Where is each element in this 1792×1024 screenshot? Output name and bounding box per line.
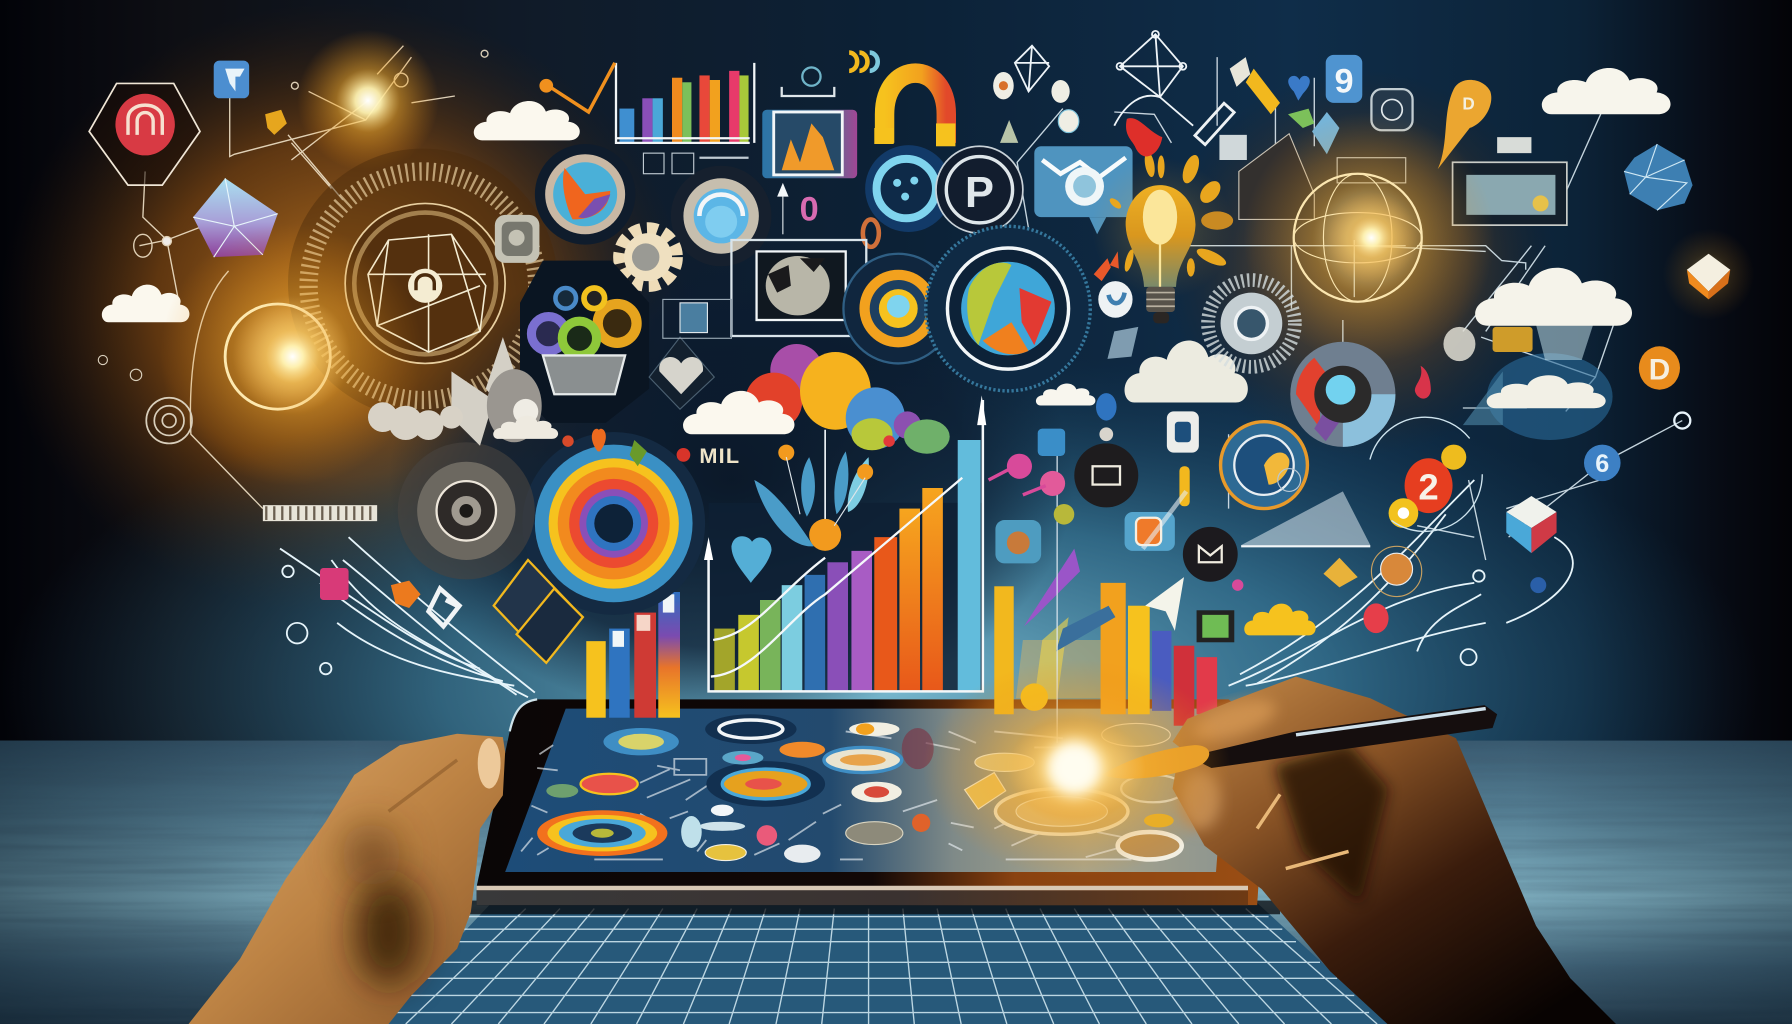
icon: orange D badge: D [1649,353,1670,386]
cloud: inside dome [1487,375,1606,408]
cutting mat grid [363,901,1389,1024]
icon: app squares and dots [1038,393,1301,506]
dashboard rainbow target [537,810,667,856]
icon: number 2 badge group: 2 [1418,466,1439,507]
tablet body [477,699,1269,905]
cloud: soft cluster [368,402,463,440]
balloons cluster [745,344,950,526]
icon: house and dashboard silhouette [1239,134,1567,225]
icon: orange cube [1663,229,1754,320]
icon: cyan face badge [865,145,952,232]
bar chart: centre [704,395,986,691]
cloud: large right [1475,268,1632,326]
icon: heart frame [649,337,714,409]
trend line [711,478,962,677]
label: MIL: MIL [699,443,740,468]
icon: framed area chart [762,110,857,178]
icon: P circle badge: P [965,169,994,217]
cloud: big centre-right [1125,341,1248,403]
icon: light bulb [1091,151,1233,323]
icon: blue G badge: 6 [1595,450,1609,478]
icon: P circle badge [936,146,1023,233]
cloud: top right [1542,68,1671,114]
right hand [1102,677,1616,1024]
icon: black round label [1074,427,1138,507]
stylus [1102,705,1497,779]
icon: red heart [1126,118,1162,156]
glow: top flare [297,30,439,171]
icon: pink dots [989,454,1243,591]
glow: stylus touch flare [922,659,1231,877]
icon: small white badges [993,72,1079,143]
icon: amber gem [265,110,287,135]
icon: grey round app [1371,89,1413,130]
icon: number zero: 0 [800,191,819,229]
icon: gold frame seal [1221,422,1307,509]
icon: crystal gem [193,178,278,257]
table surface [0,741,1792,1024]
light streams: left fan [280,537,535,697]
cloud: yellow [1244,604,1316,635]
icon: blue polygon gem [1624,144,1693,210]
icon: small chart frame [663,299,731,338]
bar chart: right of tablet [994,549,1217,726]
light streams: right fan [1229,480,1573,686]
icon: small hearts [562,429,647,466]
icon: rainbow target circle [522,432,705,615]
icon: cream gear [621,230,675,285]
icon: silver ring [671,166,771,266]
finger highlight [1188,691,1281,749]
cloud: below flower [493,416,558,439]
icon: donut chart [1290,342,1395,447]
orange line chart [546,63,615,112]
icon: white check badge [1098,281,1133,318]
icon: grey paper plane [1107,327,1138,359]
icon: blue heart and green badge [1288,76,1339,154]
icon: gear basket [520,261,649,423]
icon: white petal flower [451,337,542,446]
icon: red dot by label [677,448,690,462]
icon: number 9 badge [1326,55,1362,103]
icon: picture frame globe [731,240,866,336]
bar chart: left of tablet [586,592,680,718]
icon: silver device [495,215,539,263]
icon: yellow speech pin: D [1462,94,1475,114]
icon: rainbow magnet [874,73,955,146]
glow: right sun sphere [1243,112,1495,363]
hand shadows [354,877,423,986]
concentric target icon [98,355,192,443]
icon: white network diamond [1015,31,1193,126]
left hand [189,734,505,1024]
icon: red hexagon badge [89,83,200,185]
tablet screen [505,709,1229,872]
icon: pie dial [535,144,635,245]
screen dashboard doodles [521,714,1185,863]
cloud: left [102,285,189,322]
icon: orange ring and marker details [643,53,879,247]
bulb petals [1108,151,1233,277]
cloud: top centre-left [474,101,580,140]
icon: orange ring button [843,254,953,363]
glow: left sun ring [160,223,423,486]
icon: red pin [1415,366,1431,399]
icon: glass dome with cloud [1463,325,1613,440]
cloud: small centre [1036,383,1095,405]
chart frame background [709,503,983,691]
bar chart: top [539,63,754,143]
icons: lower-left squares [263,505,583,663]
icon: colourful globe [926,226,1090,391]
icon: number 9 badge: 9 [1334,63,1354,101]
icon: blue G badge [1584,413,1690,481]
finger shadow [1274,743,1389,903]
icons: lower-right cluster [995,491,1422,642]
icon: white cluster [1443,327,1475,361]
icon: blue envelope [1034,146,1133,234]
icon: yellow speech pin [1438,80,1491,169]
icon: orange pencil tag [1195,57,1280,160]
icon: patterned dial [1208,280,1295,367]
cloud: balloon front [683,391,794,434]
floral burst: leaves and orange ball [731,445,873,583]
network lines [134,46,1682,743]
network ring with central spiral [288,149,558,418]
icon: gold tile [1493,327,1533,352]
icon: number 2 badge group [1368,417,1482,531]
icon: blue social square [214,61,249,98]
icon: isometric cube [1506,496,1557,553]
icon: orange D badge [1639,346,1680,390]
tablet [477,699,1269,905]
icon: grey lens [398,442,535,579]
